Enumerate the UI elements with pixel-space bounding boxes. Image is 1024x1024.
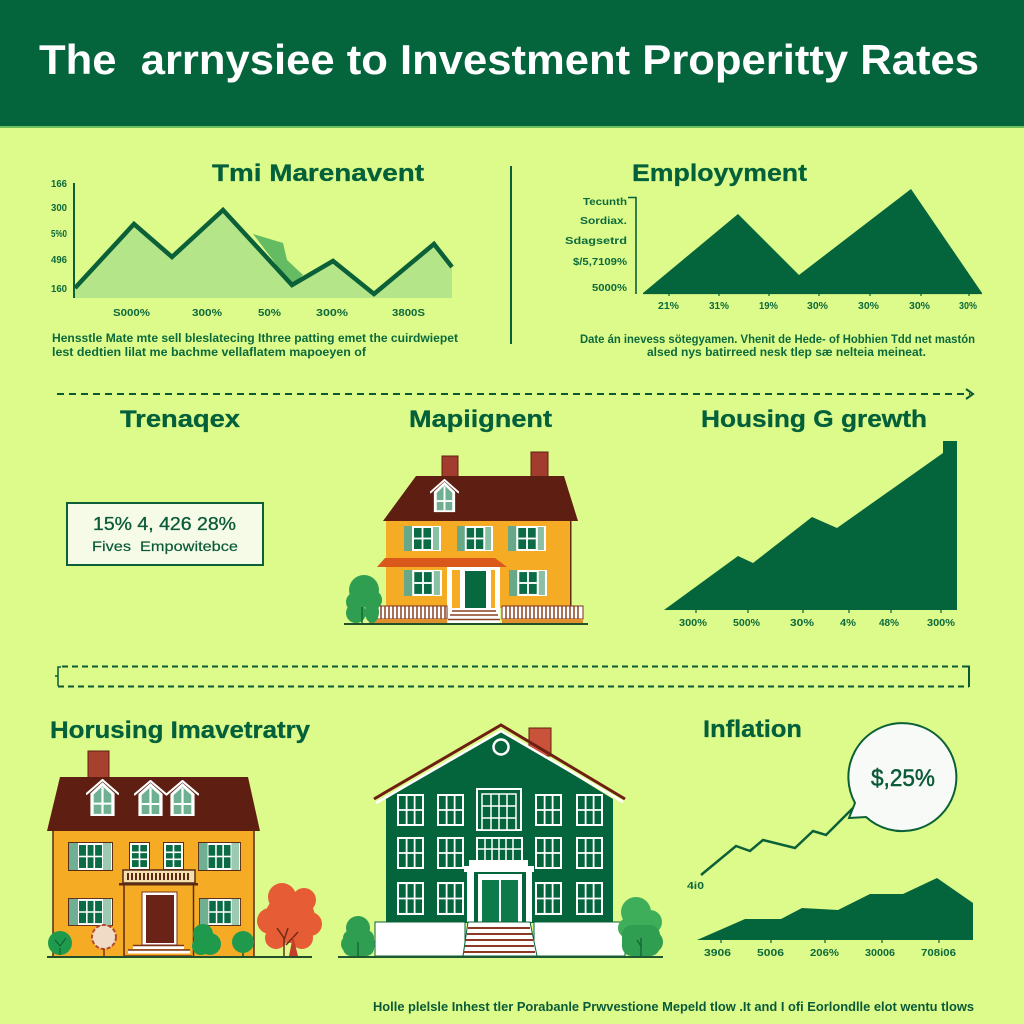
- y axis labels: 160: [51, 283, 67, 295]
- x axis labels: 500%: [733, 617, 761, 629]
- area chart: [628, 189, 982, 296]
- x axis labels: 206%: [810, 947, 840, 959]
- title banner: [0, 0, 1024, 128]
- stat box: 15% 4, 426 28%: [93, 514, 236, 534]
- callout bubble: [848, 723, 956, 831]
- x axis labels: 300%: [192, 307, 223, 319]
- y axis labels: 496: [51, 254, 67, 266]
- x axis labels: 4%: [840, 617, 857, 629]
- panel: employment: [565, 160, 982, 359]
- description: lest dedtien lilat me bachme vellaflatem mapoeyen of: [52, 347, 366, 359]
- description: [52, 333, 458, 359]
- icon: yellow house: [344, 452, 588, 624]
- description: Date án inevess sötegyamen. Vhenit de Hede- of Hobhien Tdd net mastón: [580, 334, 975, 346]
- x axis labels: [679, 617, 956, 629]
- y axis labels: $/5,7109%: [573, 256, 628, 268]
- x axis labels: 19%: [759, 300, 779, 312]
- panel: mapiignent house: [344, 406, 588, 624]
- description: Hensstle Mate mte sell bleslatecing Ithree patting emet the cuirdwiepet: [52, 333, 458, 345]
- x axis labels: [704, 947, 956, 959]
- x axis labels: 48%: [879, 617, 900, 629]
- panel: trenaqex stat: [67, 406, 263, 565]
- y axis labels: 300: [51, 202, 67, 214]
- x axis labels: 3906: [704, 947, 731, 959]
- x axis labels: 30%: [909, 300, 931, 312]
- x axis labels: 300%: [316, 307, 349, 319]
- y axis labels: 5%0: [51, 228, 67, 240]
- x axis labels: 300%: [927, 617, 956, 629]
- heading: Tmi Marenavent: [212, 160, 424, 187]
- area chart: [697, 878, 973, 943]
- x axis labels: 30%: [790, 617, 815, 629]
- x axis labels: 31%: [709, 300, 730, 312]
- line chart: [701, 808, 853, 875]
- y axis labels: [51, 178, 67, 295]
- y axis labels: [565, 196, 628, 294]
- heading: Mapiignent: [409, 406, 552, 433]
- icon: green mansion: [338, 725, 663, 957]
- description: alsed nys batirreed nesk tlep sæ nelteia meineat.: [647, 347, 926, 359]
- callout bubble: $,25%: [871, 765, 935, 792]
- heading: Employyment: [632, 160, 807, 187]
- footer note: Holle plelsle Inhest tler Porabanle Prwvestione Mepeld tlow .It and I ofi Eorlondlle elot wentu tlows: [373, 999, 974, 1014]
- x axis labels: [113, 307, 425, 319]
- heading: Horusing Imavetratry: [50, 717, 311, 744]
- heading: Inflation: [703, 716, 802, 743]
- dashed bracket divider: [55, 666, 969, 687]
- x axis labels: 50%: [258, 307, 282, 319]
- x axis labels: 708i06: [921, 947, 956, 959]
- panel: housing inventory: [47, 717, 322, 957]
- x axis labels: 30006: [865, 947, 895, 959]
- x axis labels: S000%: [113, 307, 151, 319]
- panel: left line chart: [51, 160, 458, 359]
- icon: autumn tree: [257, 883, 322, 956]
- x axis labels: 30%: [858, 300, 880, 312]
- panel: housing growth: [664, 406, 957, 629]
- y axis labels: 166: [51, 178, 67, 190]
- line chart: [74, 183, 452, 298]
- title: The arrnysiee to Investment Properitty Rates: [39, 36, 979, 83]
- heading: Housing G grewth: [701, 406, 927, 433]
- y axis labels: Sdagsetrd: [565, 235, 627, 247]
- icon: yellow house with dormers: [47, 751, 312, 957]
- stat box: [67, 503, 263, 565]
- axis label: 4i0: [687, 880, 704, 892]
- heading: Trenaqex: [120, 406, 241, 433]
- y axis labels: Sordiax.: [580, 215, 627, 227]
- x axis labels: 30%: [959, 300, 978, 312]
- panel: inflation: [687, 716, 973, 959]
- stat box: Fives Empowitebce: [92, 538, 238, 554]
- y axis labels: 5000%: [592, 282, 628, 294]
- description: [580, 334, 975, 359]
- x axis labels: 3800S: [392, 307, 425, 319]
- arrow: dashed divider: [57, 389, 973, 399]
- x axis labels: 300%: [679, 617, 708, 629]
- area chart: [664, 441, 957, 613]
- x axis labels: [658, 300, 978, 312]
- x axis labels: 21%: [658, 300, 680, 312]
- x axis labels: 30%: [807, 300, 829, 312]
- y axis labels: Tecunth: [583, 196, 627, 208]
- x axis labels: 5006: [757, 947, 784, 959]
